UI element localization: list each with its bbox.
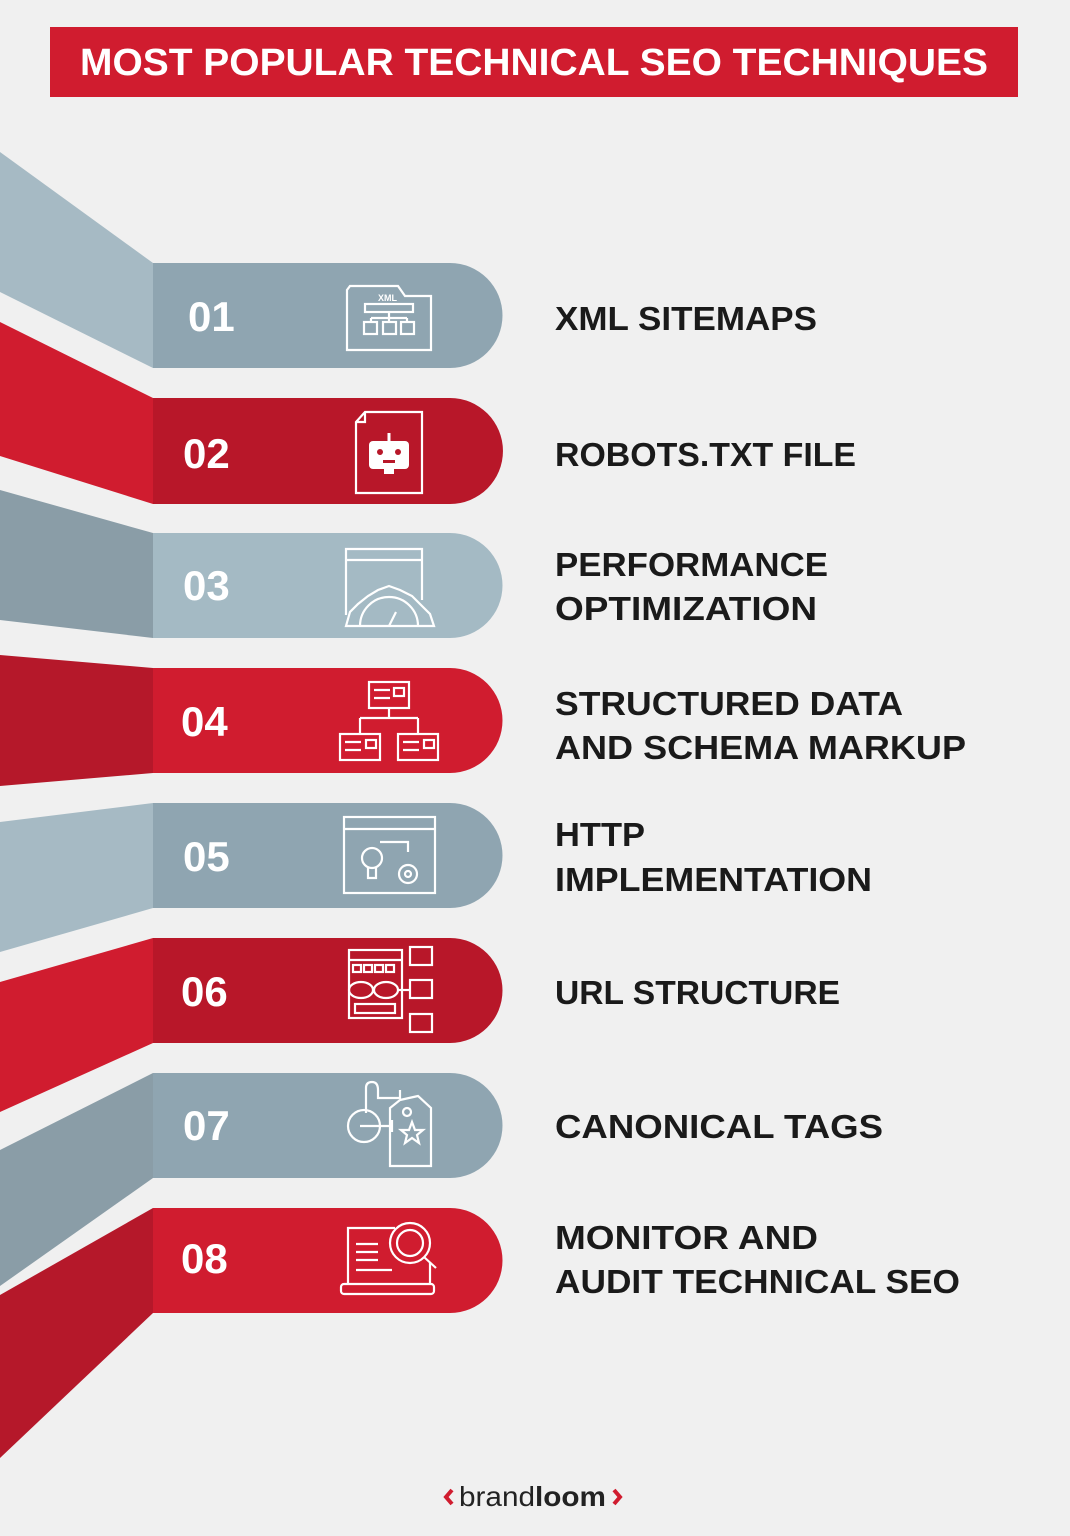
- ribbon 07: 07: [183, 1102, 230, 1149]
- icon: performance: [346, 549, 434, 626]
- logo: brandloom: brandloom: [459, 1481, 606, 1512]
- label 01: XML SITEMAPS: [555, 300, 817, 337]
- ribbon 04: [0, 655, 503, 786]
- ribbon 01: 01: [188, 293, 235, 340]
- ribbon 02: 02: [183, 430, 230, 477]
- icon: xml sitemap: [347, 286, 431, 350]
- label 07: CANONICAL TAGS: [555, 1108, 883, 1145]
- label 08: MONITOR AND: [555, 1219, 818, 1256]
- label 06: URL STRUCTURE: [555, 974, 840, 1011]
- label 04: STRUCTURED DATA: [555, 685, 903, 722]
- label 05: IMPLEMENTATION: [555, 861, 872, 898]
- ribbon 08: 08: [181, 1235, 228, 1282]
- title: [50, 27, 1018, 97]
- label 05: [555, 816, 872, 898]
- label 03: OPTIMIZATION: [555, 590, 817, 627]
- ribbon 06: 06: [181, 968, 228, 1015]
- label 04: [555, 685, 966, 766]
- ribbon 04: 04: [181, 698, 228, 745]
- ribbon 06: [0, 938, 503, 1112]
- icon: url structure: [349, 947, 432, 1032]
- ribbon 05: 05: [183, 833, 230, 880]
- icon: canonical tags: [348, 1082, 431, 1166]
- label 04: AND SCHEMA MARKUP: [555, 729, 966, 766]
- ribbon 01: [0, 152, 503, 368]
- icon: xml sitemap: XML: [378, 293, 398, 303]
- label 03: [555, 546, 828, 627]
- ribbon 02: [0, 322, 503, 504]
- icon: monitor audit: [341, 1223, 436, 1294]
- icon: structured data: [340, 682, 438, 760]
- label 08: AUDIT TECHNICAL SEO: [555, 1263, 960, 1300]
- title: MOST POPULAR TECHNICAL SEO TECHNIQUES: [80, 42, 988, 84]
- label 02: ROBOTS.TXT FILE: [555, 436, 856, 473]
- icon: robots file: [356, 412, 422, 493]
- ribbon 03: 03: [183, 562, 230, 609]
- label 08: [555, 1219, 960, 1300]
- ribbon 08: [0, 1208, 503, 1458]
- ribbon 05: [0, 803, 503, 952]
- ribbon 03: [0, 490, 503, 638]
- icon: http implementation: [344, 817, 435, 893]
- label 03: PERFORMANCE: [555, 546, 828, 583]
- label 05: HTTP: [555, 816, 645, 853]
- ribbon 07: [0, 1073, 503, 1286]
